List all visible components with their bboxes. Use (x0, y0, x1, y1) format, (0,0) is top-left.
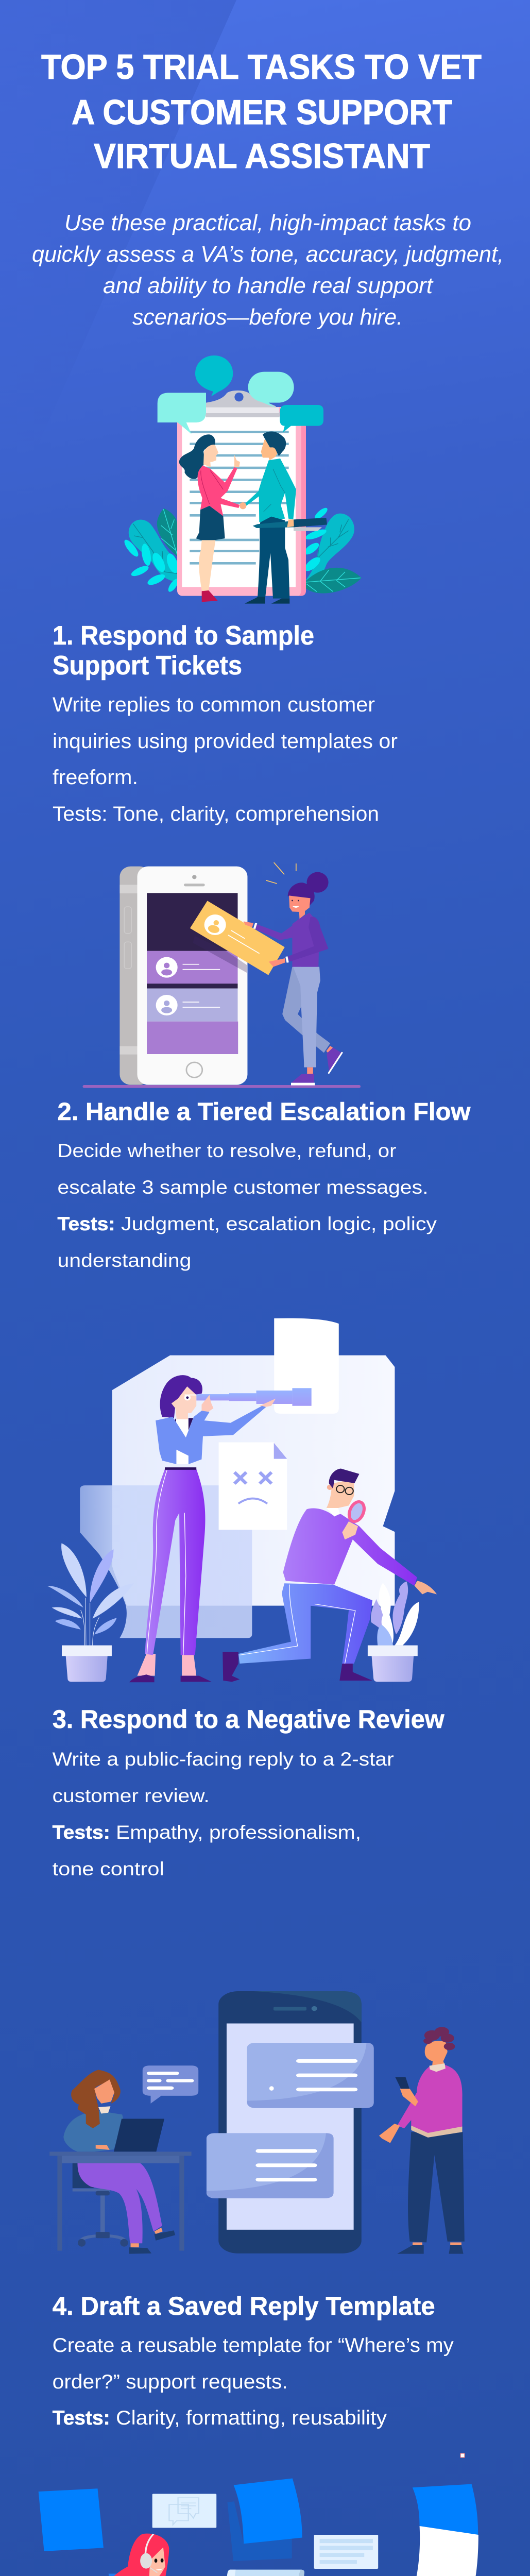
body: task 3: customer review. (53, 1785, 210, 1806)
body: task 1 (53, 693, 398, 825)
illustration: clipboard with handshake (122, 355, 362, 604)
heading: task 4: 4. Draft a Saved Reply Template (53, 2292, 435, 2320)
right plant (368, 1581, 419, 1682)
body: task 3: Tests: (53, 1822, 110, 1843)
chat bubble lower (207, 2133, 334, 2198)
body: task 4 (53, 2334, 454, 2429)
body: task 1: Write replies to common customer (53, 693, 375, 716)
body: task 1: freeform. (53, 766, 138, 789)
left plant (47, 1543, 134, 1682)
body: task 4: Tests: (53, 2407, 110, 2429)
man (240, 431, 296, 604)
small marker square (460, 2453, 465, 2458)
glass panel (80, 1485, 252, 1638)
woman (179, 434, 240, 602)
spark lines (266, 862, 296, 884)
illustration: support agent at desk (39, 2478, 478, 2576)
illustration: chat between two people (49, 1991, 465, 2254)
white document (274, 1318, 339, 1414)
floating blue papers (39, 2478, 478, 2561)
chat card (152, 2494, 216, 2528)
ticket card (190, 901, 285, 975)
right foliage (302, 506, 362, 594)
chair (109, 2574, 185, 2576)
phone (119, 867, 247, 1085)
title: A CUSTOMER SUPPORT (72, 93, 452, 132)
body: task 2: understanding (58, 1250, 192, 1271)
heading: task 2: 2. Handle a Tiered Escalation Flow (58, 1098, 471, 1126)
body: task 1: inquiries using provided templates or (53, 730, 398, 753)
monitor (219, 2570, 304, 2576)
chat bubble upper (247, 2043, 374, 2108)
intro text: scenarios—before you hire. (132, 304, 403, 330)
illustration: review search scene (47, 1318, 437, 1682)
standing man (379, 2027, 465, 2254)
title: VIRTUAL ASSISTANT (94, 137, 430, 176)
body: task 2: escalate 3 sample customer messages. (58, 1177, 429, 1198)
ground line (83, 1085, 361, 1088)
woman at desk (49, 2070, 192, 2254)
body: task 3: Empathy, professionalism, (116, 1822, 361, 1843)
clipboard (177, 391, 306, 596)
kneeling man (223, 1469, 437, 1682)
title (41, 47, 482, 176)
woman (244, 872, 342, 1086)
body: task 3: Write a public-facing reply to a 2-star (53, 1749, 394, 1770)
background diagonal shape (0, 0, 236, 531)
intro text (32, 210, 504, 330)
heading: task 1: 1. Respond to Sample (53, 621, 314, 651)
agent woman (105, 2534, 238, 2576)
heading: task 1 (53, 621, 314, 681)
back panel (112, 1355, 395, 1606)
woman with telescope (129, 1375, 276, 1682)
floating white papers (338, 2526, 478, 2576)
intro text: and ability to handle real support (103, 273, 434, 298)
intro text: Use these practical, high-impact tasks to (64, 210, 471, 235)
body: task 2: Judgment, escalation logic, policy (121, 1213, 437, 1234)
body: task 2: Tests: (58, 1213, 115, 1234)
body: task 2: Decide whether to resolve, refund, or (58, 1140, 397, 1161)
body: task 3 (53, 1749, 394, 1879)
body: task 1: Tests: Tone, clarity, comprehension (53, 803, 379, 825)
large phone (218, 1991, 362, 2253)
illustration: phone with ticket card (83, 862, 361, 1088)
body: task 2 (58, 1140, 437, 1271)
body: task 4: Create a reusable template for “Where’s my (53, 2334, 454, 2357)
small speech bubble (143, 2065, 198, 2104)
speech bubbles (158, 355, 323, 434)
pen (253, 518, 327, 531)
body: task 4: Clarity, formatting, reusability (116, 2407, 387, 2429)
telescope (196, 1388, 312, 1406)
title: TOP 5 TRIAL TASKS TO VET (41, 47, 482, 87)
left foliage (122, 509, 181, 594)
body: task 4: order?” support requests. (53, 2371, 288, 2393)
text card (314, 2535, 378, 2569)
intro text: quickly assess a VA’s tone, accuracy, judgment, (32, 242, 504, 267)
heading: task 1: Support Tickets (53, 651, 242, 681)
sad face document (219, 1443, 287, 1530)
body: task 3: tone control (53, 1858, 164, 1879)
heading: task 3: 3. Respond to a Negative Review (53, 1705, 444, 1734)
